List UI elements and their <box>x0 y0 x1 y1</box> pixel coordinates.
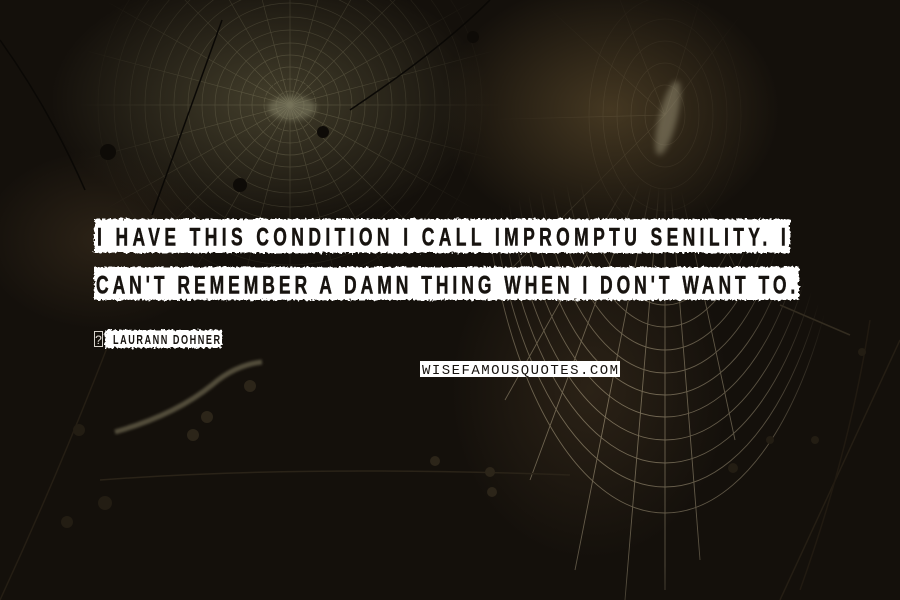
watermark: wisefamousquotes.com: WISEFAMOUSQUOTES.COM <box>422 363 618 379</box>
right spider web, lower part <box>480 192 820 600</box>
right spider web, upper part <box>554 27 727 211</box>
quote: line 1: I HAVE THIS CONDITION I CALL IMPROMPTU SENILITY. I <box>97 222 786 251</box>
quote: line 2: CAN'T REMEMBER A DAMN THING WHEN I DON'T WANT TO. <box>96 270 795 299</box>
left spider web <box>114 0 466 268</box>
author attribution: ? <box>95 333 102 347</box>
author attribution: LAURANN DOHNER <box>113 334 220 347</box>
author attribution <box>94 330 222 348</box>
blurred pale twig <box>115 362 262 432</box>
